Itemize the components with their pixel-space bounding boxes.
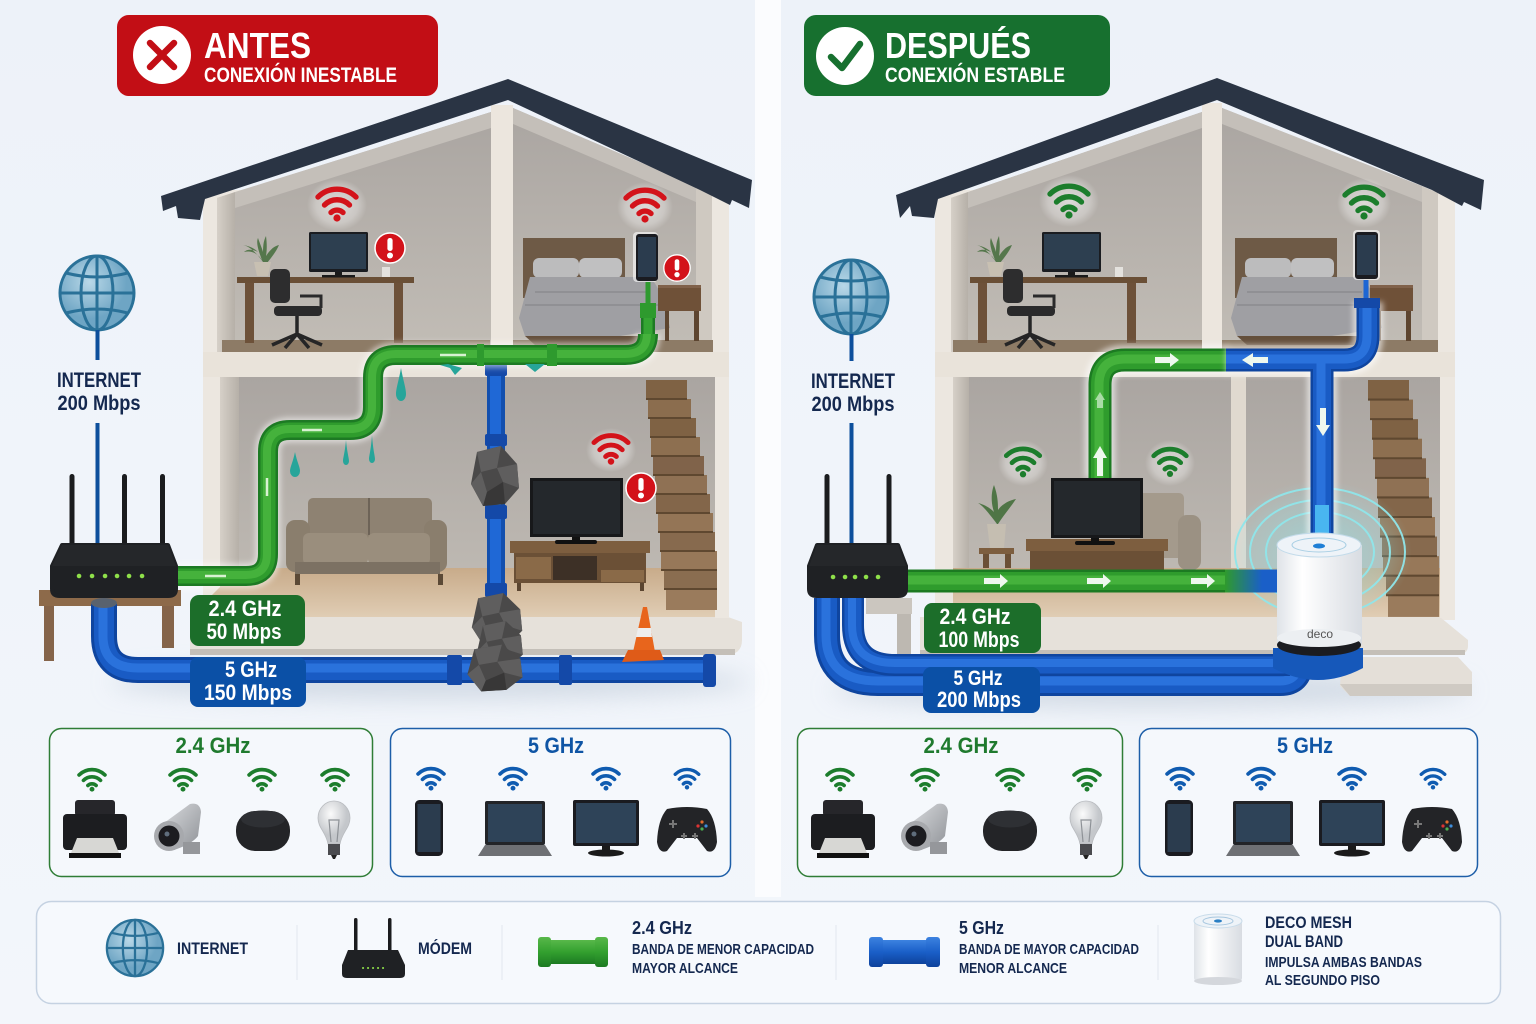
pipe: 5 GHz riser bbox=[485, 364, 507, 610]
panel: después house bbox=[809, 78, 1484, 713]
device: speaker bbox=[236, 810, 290, 851]
panel: left 5 GHz devices bbox=[390, 728, 730, 876]
desk with monitor bbox=[237, 232, 414, 348]
legend: deco mesh bbox=[1194, 913, 1422, 989]
legend: 2.4 GHz: BANDA DE MENOR CAPACIDAD bbox=[632, 941, 814, 958]
badge title: ANTES bbox=[204, 25, 311, 66]
wifi: office strong bbox=[1039, 175, 1099, 227]
sofa bbox=[286, 498, 447, 585]
deco unit: deco bbox=[1307, 627, 1333, 641]
legend: 2.4 GHz bbox=[538, 918, 814, 977]
tv stand bbox=[1026, 539, 1168, 571]
wifi row bbox=[418, 769, 699, 791]
alert: bedroom bbox=[664, 255, 690, 281]
pipe: 5 GHz main bbox=[91, 598, 716, 687]
wifi: office weak bbox=[307, 179, 367, 231]
device: phone bbox=[415, 800, 443, 856]
panel: antes house bbox=[39, 79, 752, 707]
desk with monitor bbox=[970, 232, 1147, 348]
central gutter bbox=[755, 0, 781, 897]
device: printer bbox=[63, 800, 127, 858]
house structure bbox=[920, 103, 1472, 696]
legend: 5 GHz bbox=[869, 918, 1139, 977]
legend: deco mesh: DECO MESH bbox=[1265, 913, 1352, 932]
device: phone bbox=[1165, 800, 1193, 856]
internet source: right bbox=[811, 260, 895, 416]
rock: lower blockage bbox=[467, 593, 523, 691]
legend: 5 GHz: 5 GHz bbox=[959, 918, 1004, 938]
device: camera bbox=[154, 804, 201, 854]
table bbox=[39, 590, 181, 661]
icon: check bbox=[816, 27, 874, 85]
wifi row bbox=[827, 770, 1100, 792]
tv bbox=[530, 478, 623, 544]
label: 2.4 GHz 50 Mbps: 50 Mbps bbox=[206, 619, 282, 644]
badge subtitle: CONEXIÓN INESTABLE bbox=[204, 63, 397, 87]
alert: office bbox=[375, 233, 405, 263]
pipe: green to deco bbox=[905, 580, 1280, 581]
roof bbox=[896, 78, 1484, 218]
label: 2.4 GHz 50 Mbps bbox=[190, 595, 305, 646]
label: 2.4 GHz 100 Mbps: 100 Mbps bbox=[938, 627, 1020, 652]
deco glow bbox=[1228, 480, 1412, 624]
sofa behind tv bbox=[1130, 493, 1201, 570]
label: 5 GHz 200 Mbps: 200 Mbps bbox=[937, 687, 1021, 712]
legend: modem: MÓDEM bbox=[418, 939, 472, 958]
rock: upper blockage bbox=[471, 446, 519, 506]
badge: después bbox=[804, 15, 1110, 96]
legend: 2.4 GHz: MAYOR ALCANCE bbox=[632, 960, 738, 977]
icon: error cross bbox=[133, 26, 191, 84]
device: gamepad bbox=[1402, 807, 1462, 852]
roof bbox=[161, 79, 752, 220]
router bbox=[52, 474, 176, 596]
stairs bbox=[1368, 380, 1439, 617]
table bbox=[866, 598, 912, 654]
heading: 5 GHz bbox=[528, 733, 584, 758]
wifi row bbox=[79, 770, 348, 792]
panel: legend bbox=[36, 902, 1500, 1004]
internet source: left: 200 Mbps bbox=[58, 392, 140, 415]
device: bulb bbox=[1070, 801, 1102, 859]
pipe: blue feed to bedroom and deco bbox=[1226, 280, 1380, 545]
pipes: 5 GHz double run bbox=[826, 598, 1300, 683]
wifi: living left strong bbox=[998, 440, 1048, 486]
tv stand bbox=[510, 541, 650, 591]
badge subtitle: CONEXIÓN ESTABLE bbox=[885, 63, 1065, 87]
legend: deco mesh: AL SEGUNDO PISO bbox=[1265, 972, 1380, 989]
legend: deco mesh: IMPULSA AMBAS BANDAS bbox=[1265, 954, 1422, 971]
wifi: bedroom weak bbox=[617, 182, 673, 232]
internet line: router feed bbox=[96, 423, 100, 548]
device: laptop bbox=[1226, 801, 1300, 856]
internet line: router feed bbox=[850, 423, 854, 548]
rings: deco signal bbox=[1235, 488, 1405, 616]
label: 5 GHz 150 Mbps bbox=[190, 657, 306, 707]
device: camera bbox=[901, 804, 948, 854]
phone bbox=[1353, 230, 1380, 280]
phone bbox=[633, 232, 658, 282]
drips bbox=[290, 364, 545, 477]
device: monitor bbox=[1319, 800, 1385, 856]
heading: 5 GHz bbox=[1277, 733, 1333, 758]
badge title: DESPUÉS bbox=[885, 25, 1031, 66]
internet source: right: INTERNET bbox=[811, 370, 895, 393]
wifi row bbox=[1167, 769, 1445, 791]
device: laptop bbox=[478, 801, 552, 856]
device: gamepad bbox=[657, 807, 717, 852]
traffic cone bbox=[622, 607, 664, 662]
label: 2.4 GHz 50 Mbps: 2.4 GHz bbox=[208, 596, 282, 621]
device: printer bbox=[811, 800, 875, 858]
router bbox=[809, 474, 906, 596]
wifi: living room weak bbox=[586, 428, 636, 472]
wifi: living right strong bbox=[1145, 440, 1195, 486]
label: 2.4 GHz 100 Mbps bbox=[924, 603, 1041, 653]
house structure bbox=[190, 105, 742, 655]
device: monitor bbox=[573, 800, 639, 856]
internet source: left: INTERNET bbox=[57, 369, 141, 392]
pipe: 2.4 GHz leaking bbox=[178, 282, 656, 576]
label: 5 GHz 150 Mbps: 150 Mbps bbox=[204, 680, 292, 705]
label: 5 GHz 200 Mbps: 5 GHz bbox=[954, 667, 1002, 690]
wifi: bedroom strong bbox=[1337, 178, 1391, 228]
heading: 2.4 GHz bbox=[176, 733, 250, 758]
bed and nightstand bbox=[519, 238, 701, 345]
internet source: right: 200 Mbps bbox=[812, 393, 894, 416]
deco unit bbox=[1273, 533, 1363, 680]
badge: antes bbox=[117, 15, 438, 96]
panel: right 5 GHz devices bbox=[1140, 728, 1478, 876]
legend: 2.4 GHz: 2.4 GHz bbox=[632, 918, 692, 938]
panel: left 2.4 GHz devices bbox=[50, 728, 372, 876]
alert: living room bbox=[626, 473, 656, 503]
label: 5 GHz 150 Mbps: 5 GHz bbox=[225, 657, 277, 682]
device: speaker bbox=[983, 810, 1037, 851]
legend: 5 GHz: MENOR ALCANCE bbox=[959, 960, 1067, 977]
label: 5 GHz 200 Mbps bbox=[923, 667, 1040, 713]
legend: 5 GHz: BANDA DE MAYOR CAPACIDAD bbox=[959, 941, 1139, 958]
legend: internet: INTERNET bbox=[177, 939, 249, 958]
label: 2.4 GHz 100 Mbps: 2.4 GHz bbox=[940, 604, 1010, 629]
internet source: left bbox=[57, 256, 141, 415]
stairs bbox=[646, 380, 717, 610]
device: bulb bbox=[318, 801, 350, 859]
legend: modem bbox=[342, 918, 472, 978]
legend: deco mesh: DUAL BAND bbox=[1265, 932, 1343, 951]
arrows: flow bbox=[984, 353, 1330, 588]
tv bbox=[1051, 478, 1143, 545]
heading: 2.4 GHz bbox=[924, 733, 998, 758]
panel: right 2.4 GHz devices bbox=[798, 728, 1122, 876]
pipe: green up to split bbox=[1099, 359, 1228, 478]
plant bbox=[978, 485, 1016, 568]
legend: internet bbox=[107, 920, 249, 976]
bed and nightstand bbox=[1231, 238, 1413, 345]
